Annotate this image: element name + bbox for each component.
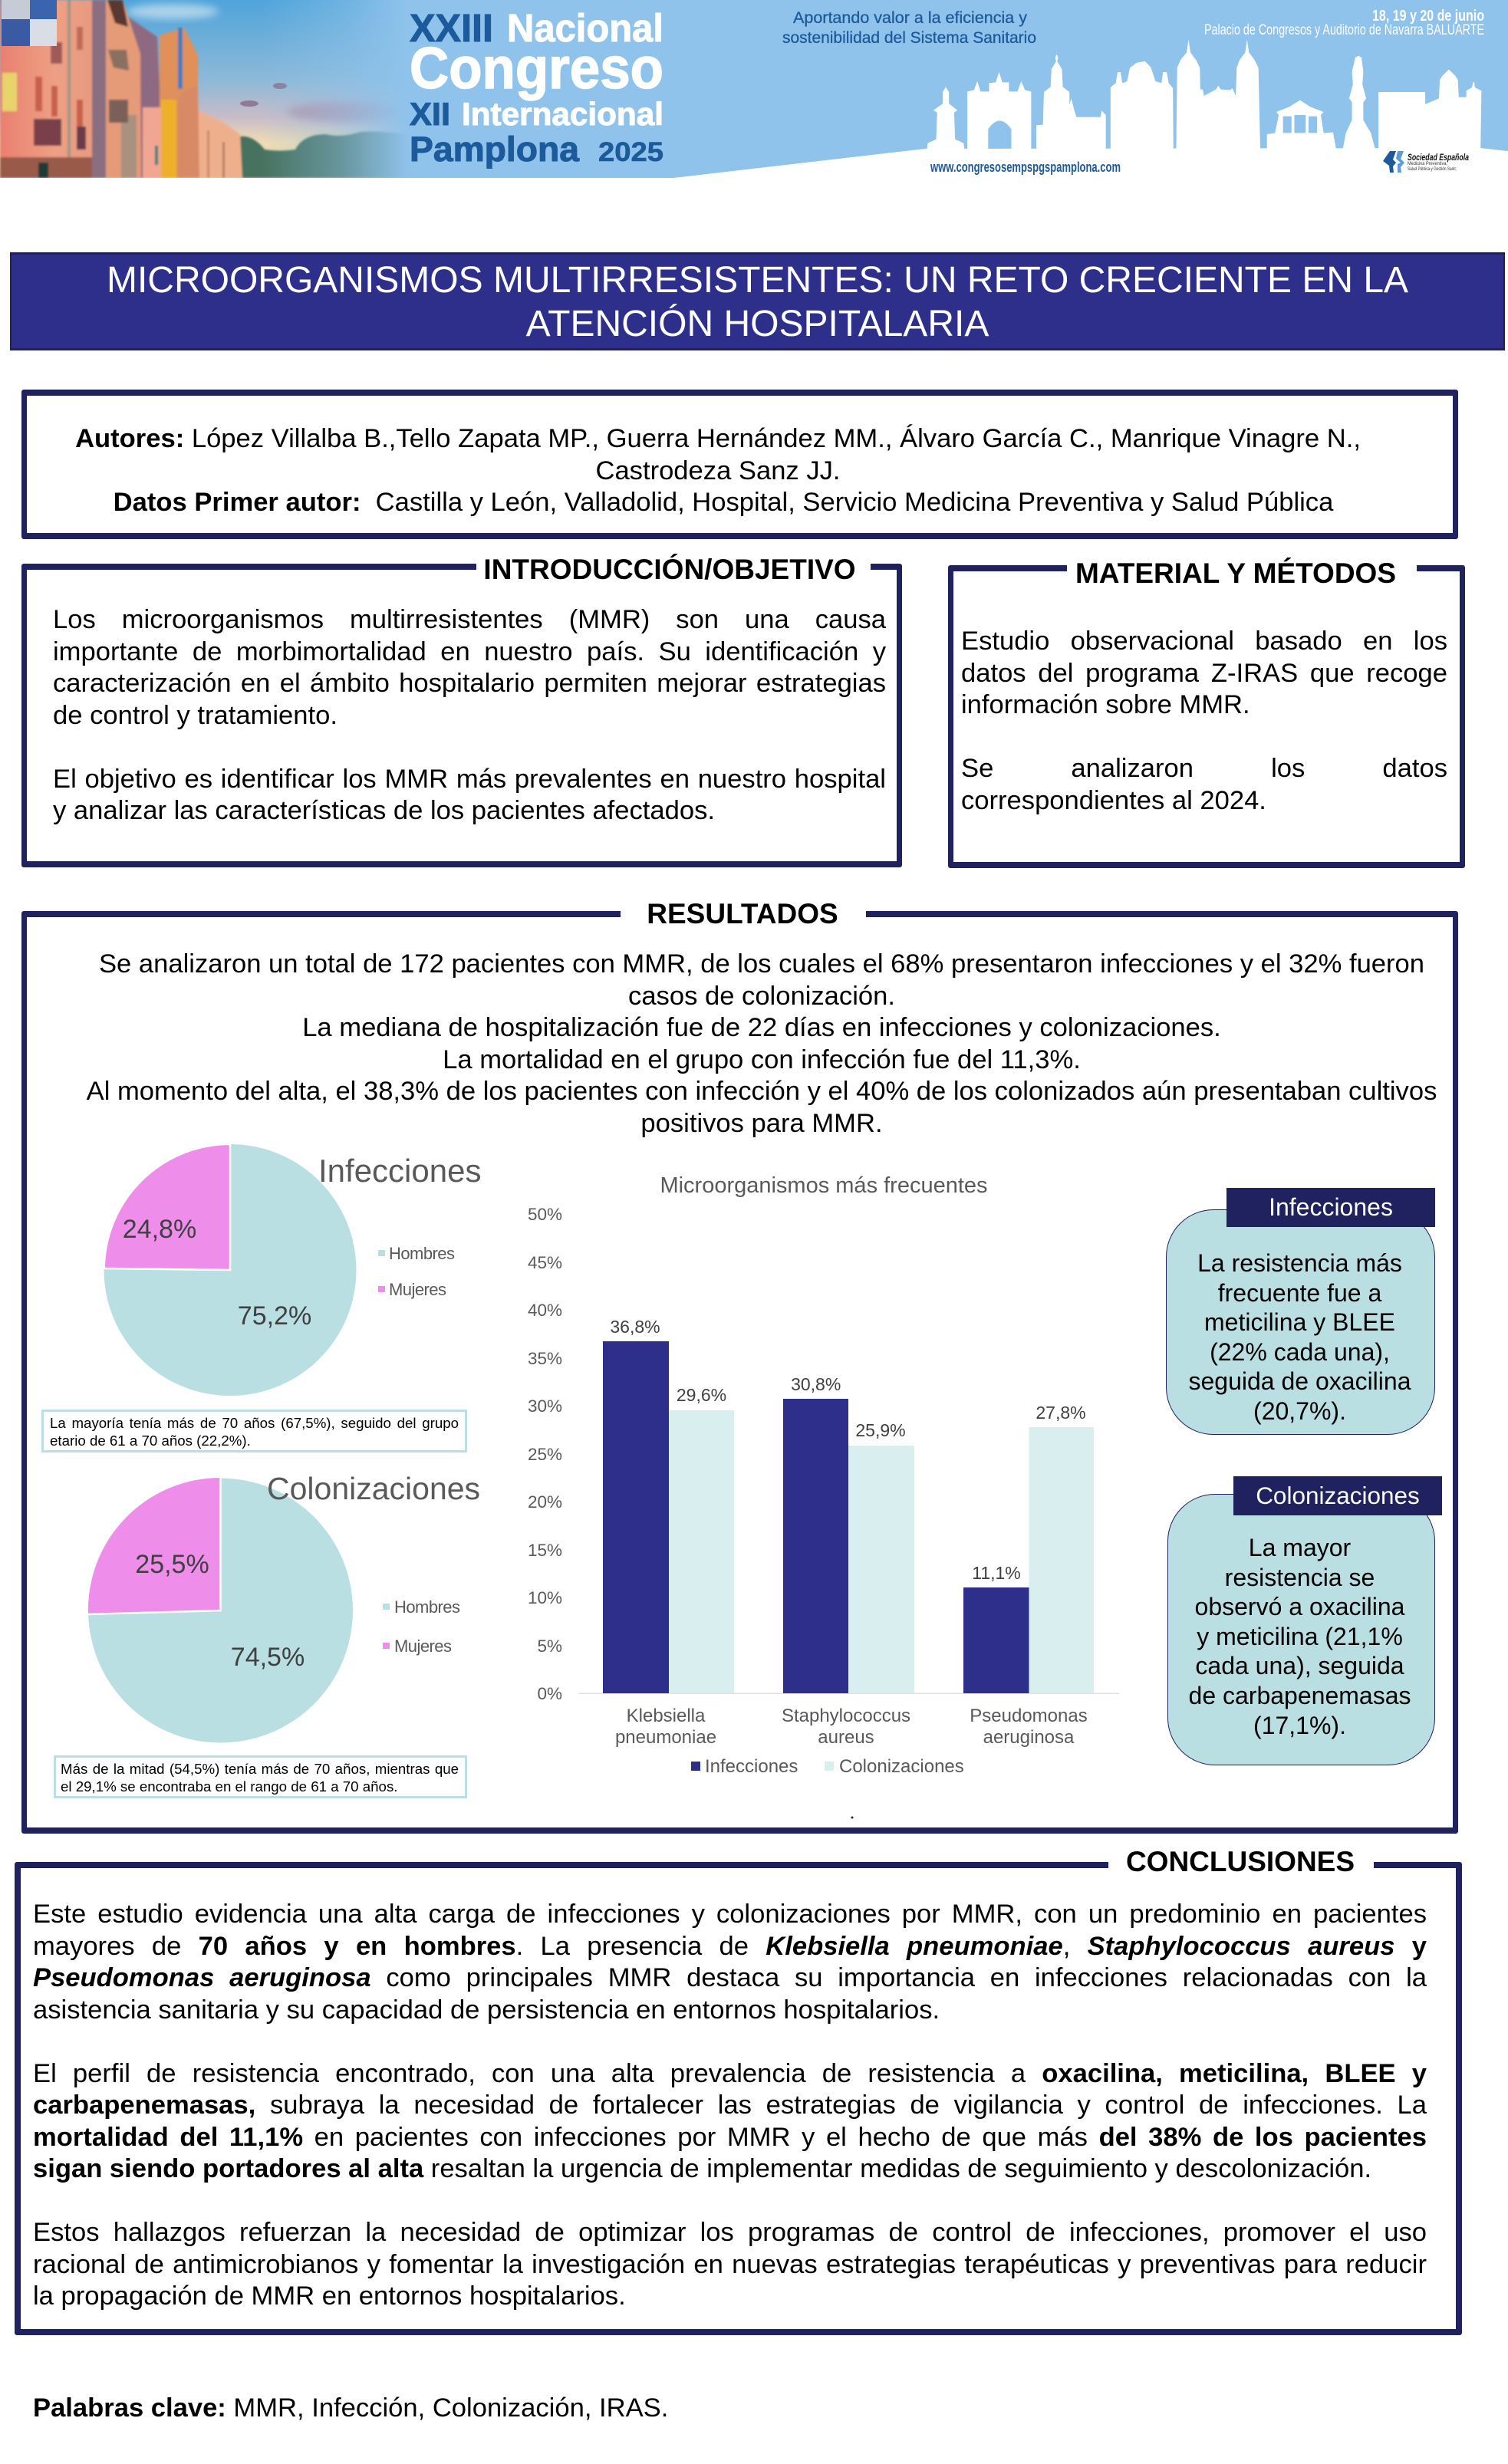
callout text: colonizations: resistencia se [1225,1564,1375,1591]
callout text: colonizations: (17,1%). [1253,1712,1346,1739]
callout text: infections: (20,7%). [1253,1397,1346,1425]
results summary text [86,949,1437,1138]
photo: Pamplona street at sunset [0,0,408,178]
bar chart: most frequent microorganisms: Colonizaciones [839,1756,964,1777]
banner background [0,0,1508,178]
congress name: XII [410,96,450,132]
stray dot [851,1816,853,1819]
pie chart: colonizations by sex: 25,5% [135,1550,209,1579]
bar chart: most frequent microorganisms: 29,6% [677,1385,726,1405]
caption: colonizations age [54,1755,467,1798]
pie chart: infections by sex: 24,8% [123,1215,196,1244]
callout: colonizations resistance [1167,1494,1435,1765]
bar chart: most frequent microorganisms: 50% [528,1205,562,1224]
heading: results: RESULTADOS [647,898,838,929]
pie chart: infections by sex: Mujeres [389,1280,446,1299]
bar chart: most frequent microorganisms: 30,8% [791,1374,841,1394]
caption: infections age [41,1410,467,1452]
title bar: ATENCIÓN HOSPITALARIA [526,304,989,344]
introduction text: El objetivo es identificar los MMR más prevalentes en nuestro hospital [53,764,886,793]
bar chart: most frequent microorganisms: aeruginosa [983,1727,1075,1748]
bar chart: most frequent microorganisms: 35% [528,1349,562,1368]
introduction text: caracterización en el ámbito hospitalario permiten mejorar estrategias [53,669,886,698]
congress name: Congreso [410,36,663,101]
methods text: Se analizaron los datos [961,754,1447,783]
congress name: Pamplona [410,130,580,169]
panel: introduction [21,564,902,867]
congress name: Nacional [507,6,663,50]
bar chart: most frequent microorganisms: Klebsiella [627,1706,706,1726]
results summary text: La mediana de hospitalización fue de 22 días en infecciones y colonizaciones. [302,1013,1221,1042]
checker flag icon [2,0,57,46]
bar chart: most frequent microorganisms: 36,8% [610,1317,660,1337]
caption: infections age: La mayoría tenía más de 70 años (67,5%), seguido del grupo [50,1415,459,1431]
results summary text: Al momento del alta, el 38,3% de los pacientes con infección y el 40% de los colonizados aún presentaban cultivos [87,1077,1437,1106]
results summary text: La mortalidad en el grupo con infección fue del 11,3%. [443,1044,1081,1074]
heading: methods: MATERIAL Y MÉTODOS [1075,558,1396,589]
conclusions text: racional de antimicrobianos y fomentar la investigación en nuevas estrategias terapéuticas y preventivas para reducir [33,2250,1427,2279]
authors text [75,424,1361,517]
bar chart: most frequent microorganisms: 11,1% [972,1563,1021,1583]
introduction text [53,605,886,825]
caption: infections age: etario de 61 a 70 años (22,2%). [50,1433,251,1449]
congress motto [782,9,1036,47]
callout text: colonizations: de carbapenemasas [1189,1682,1411,1709]
methods text: información sobre MMR. [961,690,1250,719]
pie chart: infections by sex: Infecciones [318,1153,481,1189]
pie chart: infections by sex: 75,2% [238,1301,311,1331]
pie chart: colonizations by sex: 74,5% [231,1643,305,1672]
conclusions text: asistencia sanitaria y su capacidad de persistencia en entornos hospitalarios. [33,1995,940,2025]
congress name: 2025 [598,137,663,167]
bar chart: most frequent microorganisms: pneumoniae [615,1727,716,1748]
results summary text: positivos para MMR. [640,1109,883,1138]
title bar: MICROORGANISMOS MULTIRRESISTENTES: UN RETO CRECIENTE EN LA [107,260,1408,301]
white ground [673,148,1508,178]
conclusions text: mayores de 70 años y en hombres. La presencia de Klebsiella pneumoniae, Staphylococcus aureus y [33,1932,1427,1961]
panel: methods [948,565,1465,868]
congress motto: Aportando valor a la eficiencia y [793,9,1028,27]
callout tag: colonizations [1233,1476,1442,1515]
society logo: Medicina Preventiva, [1408,162,1447,166]
congress name: Internacional [462,96,663,132]
conclusions text: Pseudomonas aeruginosa como principales MMR destaca su importancia en infecciones relacionadas con la [33,1963,1427,1992]
conclusions text: sigan siendo portadores al alta resaltan la urgencia de implementar medidas de seguimiento y descolonización. [33,2154,1371,2183]
bar chart: most frequent microorganisms: 10% [528,1588,562,1607]
panel: conclusions [15,1862,1462,2335]
bar chart: most frequent microorganisms: Staphylococcus [782,1706,910,1726]
conclusions text [33,1900,1427,2311]
bar chart: most frequent microorganisms: Pseudomonas [970,1706,1088,1726]
introduction text: Los microorganismos multirresistentes (MMR) son una causa [53,605,886,634]
pie chart: colonizations by sex: Hombres [394,1597,460,1617]
panel: authors [21,390,1458,539]
pie chart: colonizations by sex: Colonizaciones [267,1471,480,1506]
heading: conclusions: CONCLUSIONES [1126,1846,1355,1877]
congress name: XXIII [410,6,493,50]
bar chart: most frequent microorganisms: 27,8% [1036,1403,1086,1423]
results summary text: casos de colonización. [628,982,895,1011]
society logo: Sociedad Española [1408,152,1469,163]
heading: introduction: INTRODUCCIÓN/OBJETIVO [483,554,856,585]
date and venue [1204,8,1484,38]
callout text: colonizations: observó a oxacilina [1195,1593,1404,1620]
pie chart: infections by sex [104,1144,481,1396]
society logo [1383,151,1469,173]
bar chart: most frequent microorganisms: 20% [528,1492,562,1512]
title bar [10,252,1505,350]
callout tag: colonizations: Colonizaciones [1256,1482,1420,1509]
callout text: colonizations: cada una), seguida [1195,1652,1404,1679]
callout text: infections: (22% cada una), [1210,1337,1390,1365]
callout text: colonizations [1189,1534,1411,1739]
callout text: infections [1189,1249,1411,1425]
bar chart: most frequent microorganisms: 30% [528,1396,562,1416]
banner: congress header [0,0,1508,178]
bar chart: most frequent microorganisms: 25% [528,1445,562,1464]
authors text: Castrodeza Sanz JJ. [595,456,841,485]
methods text: datos del programa Z-IRAS que recoge [961,658,1447,687]
authors text: Autores: López Villalba B.,Tello Zapata MP., Guerra Hernández MM., Álvaro García C., Manrique Vinagre N., [75,424,1361,453]
methods text: Estudio observacional basado en los [961,627,1447,656]
results summary text: Se analizaron un total de 172 pacientes con MMR, de los cuales el 68% presentaron infecciones y el 32% fueron [99,949,1424,979]
conclusions text: Este estudio evidencia una alta carga de infecciones y colonizaciones por MMR, con un predominio en pacientes [33,1900,1427,1929]
callout tag: infections [1226,1188,1435,1227]
bar chart: most frequent microorganisms: 0% [537,1684,562,1703]
panel: results [21,911,1458,1834]
callout text: colonizations: y meticilina (21,1% [1197,1623,1403,1650]
conclusions text: carbapenemasas, subraya la necesidad de fortalecer las estrategias de vigilancia y control de infecciones. La [33,2091,1427,2120]
date and venue: 18, 19 y 20 de junio [1372,8,1484,25]
pie chart: colonizations by sex [88,1471,480,1742]
caption: colonizations age: Más de la mitad (54,5%) tenía más de 70 años, mientras que [61,1761,459,1777]
society logo: Salud Pública y Gestión Sanit. [1408,167,1457,172]
authors text: Datos Primer autor: Castilla y León, Valladolid, Hospital, Servicio Medicina Preventiva y Salud Pública [114,488,1333,517]
conclusions text: El perfil de resistencia encontrado, con una alta prevalencia de resistencia a oxacilina, meticilina, BLEE y [33,2059,1427,2088]
skyline silhouette [927,40,1481,151]
conclusions text: Estos hallazgos refuerzan la necesidad de optimizar los programas de control de infecciones, promover el uso [33,2218,1427,2247]
bar chart: most frequent microorganisms [528,1173,1119,1777]
callout text: infections: frecuente fue a [1218,1279,1381,1307]
bar chart: most frequent microorganisms: 15% [528,1541,562,1560]
callout: infections resistance [1166,1209,1435,1435]
website: www.congresosempspgspamplona.com [930,160,1121,175]
callout text: colonizations: La mayor [1249,1534,1351,1561]
pie chart: colonizations by sex: Mujeres [394,1637,452,1656]
bar chart: most frequent microorganisms: 5% [537,1637,562,1656]
pie chart: infections by sex: Hombres [389,1244,455,1263]
methods text: correspondientes al 2024. [961,785,1266,814]
bar chart: most frequent microorganisms: 40% [528,1301,562,1320]
introduction text: importante de morbimortalidad en nuestro país. Su identificación y [53,637,886,666]
bar chart: most frequent microorganisms: 25,9% [855,1420,906,1440]
bar chart: most frequent microorganisms: aureus [818,1727,874,1748]
callout text: infections: meticilina y BLEE [1204,1308,1395,1336]
callout text: infections: seguida de oxacilina [1189,1367,1411,1395]
congress motto: sostenibilidad del Sistema Sanitario [782,29,1036,47]
caption: colonizations age: el 29,1% se encontraba en el rango de 61 a 70 años. [61,1778,397,1795]
conclusions text: mortalidad del 11,1% en pacientes con infecciones por MMR y el hecho de que más del 38% de los pacientes [33,2123,1427,2152]
congress name [410,6,663,169]
callout tag: infections: Infecciones [1269,1193,1393,1221]
callout text: infections: La resistencia más [1197,1249,1402,1277]
introduction text: y analizar las características de los pacientes afectados. [53,796,715,825]
conclusions text: la propagación de MMR en entornos hospitalarios. [33,2281,626,2311]
bar chart: most frequent microorganisms: 45% [528,1253,562,1272]
introduction text: de control y tratamiento. [53,701,337,730]
methods text [961,627,1447,814]
bar chart: most frequent microorganisms: Infecciones [705,1756,798,1777]
bar chart: most frequent microorganisms: Microorganismos más frecuentes [660,1173,988,1198]
keywords: Palabras clave: MMR, Infección, Colonización, IRAS. [33,2393,668,2423]
